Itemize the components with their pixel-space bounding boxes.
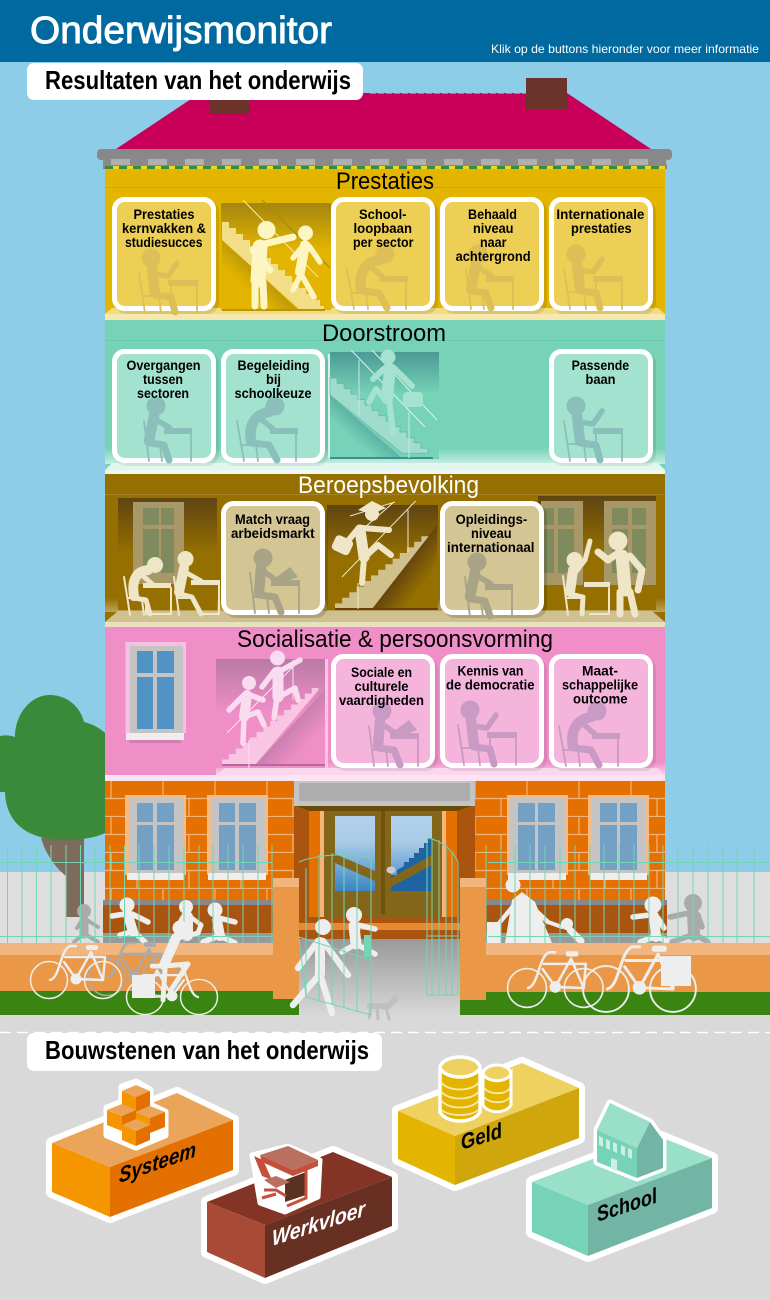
button: Opleidingsniveau internationaal: [442, 504, 547, 618]
grey child right: [670, 894, 708, 942]
white bicycle: [30, 945, 122, 998]
child running through gate: [342, 907, 375, 957]
icon: cubes: [107, 1082, 165, 1147]
button: Maatschappelijke outcome: [552, 656, 656, 771]
button: Begeleiding bij schoolkeuze: Begeleiding: [238, 357, 310, 373]
bicycle right 1: [508, 951, 603, 1007]
button: Overgangen tussen sectoren: tussen: [143, 371, 183, 387]
floor: Socialisatie & persoonsvorming: [105, 626, 665, 781]
classroom left with two pupils: [118, 498, 220, 615]
button: Prestaties kernvakken & studiesucces: kernvakken &: [122, 220, 206, 236]
button: Internationale prestaties: prestaties: [571, 220, 632, 236]
button: Passende baan: [552, 352, 656, 466]
block: Geld: [398, 1057, 579, 1185]
button: Kennis van de democratie: [442, 656, 547, 771]
button: School-loopbaan per sector: loopbaan: [354, 220, 412, 236]
label: Resultaten van het onderwijs: Resultaten van het onderwijs: [45, 65, 351, 95]
door: [324, 811, 442, 917]
instruction text: Klik op de buttons hieronder voor meer informatie: [491, 42, 759, 56]
label: Resultaten van het onderwijs: [27, 63, 363, 100]
block label: School: [597, 1183, 657, 1227]
child B: [178, 900, 200, 935]
button: Overgangen tussen sectoren: sectoren: [137, 385, 189, 401]
floor: Doorstroom: [105, 320, 665, 474]
button: Behaald niveau naar achtergrond: niveau: [473, 220, 514, 236]
block: Systeem: [52, 1082, 233, 1217]
bicycles: [30, 920, 696, 1015]
button: School-loopbaan per sector: School-: [359, 206, 407, 222]
button: Prestaties kernvakken & studiesucces: [114, 200, 219, 314]
block: School: [532, 1103, 712, 1256]
button: Opleidingsniveau internationaal: niveau: [471, 525, 512, 541]
button: Passende baan: baan: [586, 371, 616, 387]
button: Overgangen tussen sectoren: Overgangen: [126, 357, 200, 373]
button: Begeleiding bij schoolkeuze: bij: [266, 371, 281, 387]
button: Internationale prestaties: [552, 200, 656, 314]
grey bicycle: [88, 942, 180, 996]
button: Sociale en culturele vaardigheden: vaardigheden: [339, 692, 424, 708]
entrance with door: [294, 781, 475, 1017]
bicycle right 2 with crate: [583, 946, 696, 1012]
fence left and right: [0, 845, 770, 943]
window 4: [588, 795, 649, 880]
child with bike right: [633, 896, 670, 943]
sky background: [0, 62, 770, 873]
window 3: [507, 795, 568, 880]
gutter: [97, 149, 672, 160]
button: Overgangen tussen sectoren: [114, 352, 219, 466]
title: Onderwijsmonitor: [30, 10, 332, 52]
staircase with teacher and pupil: [221, 200, 331, 311]
staircase with climbing person: [328, 350, 439, 459]
button: Maatschappelijke outcome: outcome: [573, 690, 628, 706]
heading: Prestaties: [336, 168, 434, 195]
staircase with two climbing people: [216, 650, 328, 768]
button: Behaald niveau naar achtergrond: naar: [480, 234, 507, 250]
button: Kennis van de democratie: de democratie: [446, 676, 535, 692]
button: Prestaties kernvakken & studiesucces: studiesucces: [125, 234, 203, 250]
window 2: [207, 795, 268, 880]
block label: Systeem: [119, 1137, 196, 1188]
button: Kennis van de democratie: Kennis van: [458, 662, 524, 678]
button: School-loopbaan per sector: per sector: [353, 234, 414, 250]
button: Maatschappelijke outcome: schappelijke: [562, 676, 638, 692]
children behind the wall: [74, 878, 708, 943]
right gate wing: [427, 838, 458, 995]
button: Sociale en culturele vaardigheden: culturele: [354, 678, 409, 694]
floor: Beroepsbevolking: [105, 472, 665, 627]
button: Sociale en culturele vaardigheden: Sociale en: [351, 664, 412, 680]
garden wall and grass: [0, 878, 770, 1015]
porch lintel: [294, 781, 475, 811]
window: [126, 642, 186, 743]
road and pavement: [0, 872, 770, 1300]
button: Maatschappelijke outcome: Maat-: [582, 662, 618, 678]
header bar: [0, 0, 770, 62]
cyclist with bicycle: [126, 920, 218, 1015]
window 1: [125, 795, 186, 880]
classroom right with teacher and pupil: [538, 496, 656, 615]
path through gate: [299, 939, 460, 1017]
icon: school building: [597, 1103, 663, 1178]
heading: Doorstroom: [322, 320, 446, 347]
button: Begeleiding bij schoolkeuze: schoolkeuze: [234, 385, 312, 401]
floor: Prestaties: [105, 168, 665, 320]
button: Behaald niveau naar achtergrond: [442, 200, 547, 314]
button: Behaald niveau naar achtergrond: achtergrond: [456, 248, 531, 264]
button: Match vraag arbeidsmarkt: arbeidsmarkt: [231, 525, 315, 541]
button: Prestaties kernvakken & studiesucces: Prestaties: [134, 206, 195, 222]
tree: [0, 695, 105, 917]
button: Match vraag arbeidsmarkt: Match vraag: [235, 511, 310, 527]
left gate wing: [299, 853, 371, 1015]
button: Internationale prestaties: Internationale: [556, 206, 645, 222]
button: Passende baan: Passende: [572, 357, 629, 373]
icon: coin stacks: [440, 1057, 511, 1121]
ground floor: brick facade: [103, 781, 667, 944]
block: Werkvloer: [207, 1146, 392, 1278]
woman with stroller: [487, 878, 581, 943]
label: Bouwstenen van het onderwijs: Bouwstenen van het onderwijs: [45, 1035, 369, 1065]
roof: [97, 78, 672, 169]
button: School-loopbaan per sector: [334, 200, 438, 314]
button: Opleidingsniveau internationaal: Opleidings-: [456, 511, 528, 527]
dog: [369, 996, 396, 1019]
staircase with graduate: [327, 501, 438, 610]
button: Opleidingsniveau internationaal: internationaal: [447, 539, 534, 555]
child C: [203, 902, 235, 943]
heading: Beroepsbevolking: [298, 472, 479, 499]
icon: school desk and chair: [252, 1146, 320, 1212]
block label: Werkvloer: [272, 1196, 366, 1251]
chimney right: [526, 78, 567, 110]
adult walking: [293, 919, 348, 1013]
label: Bouwstenen van het onderwijs: [27, 1033, 382, 1071]
people in front of gate: [293, 907, 396, 1019]
button: Behaald niveau naar achtergrond: Behaald: [468, 206, 517, 222]
gate pillar right: [460, 878, 486, 1000]
grey child left: [74, 904, 98, 942]
button: Match vraag arbeidsmarkt: [224, 504, 328, 618]
heading: Socialisatie & persoonsvorming: [237, 626, 553, 653]
button: Sociale en culturele vaardigheden: [334, 656, 438, 771]
chimney left: [210, 90, 250, 114]
gate: [299, 838, 458, 1015]
gate pillar left: [273, 878, 299, 999]
block label: Geld: [461, 1118, 502, 1155]
child A: [112, 898, 148, 942]
button: Begeleiding bij schoolkeuze: [224, 352, 328, 466]
